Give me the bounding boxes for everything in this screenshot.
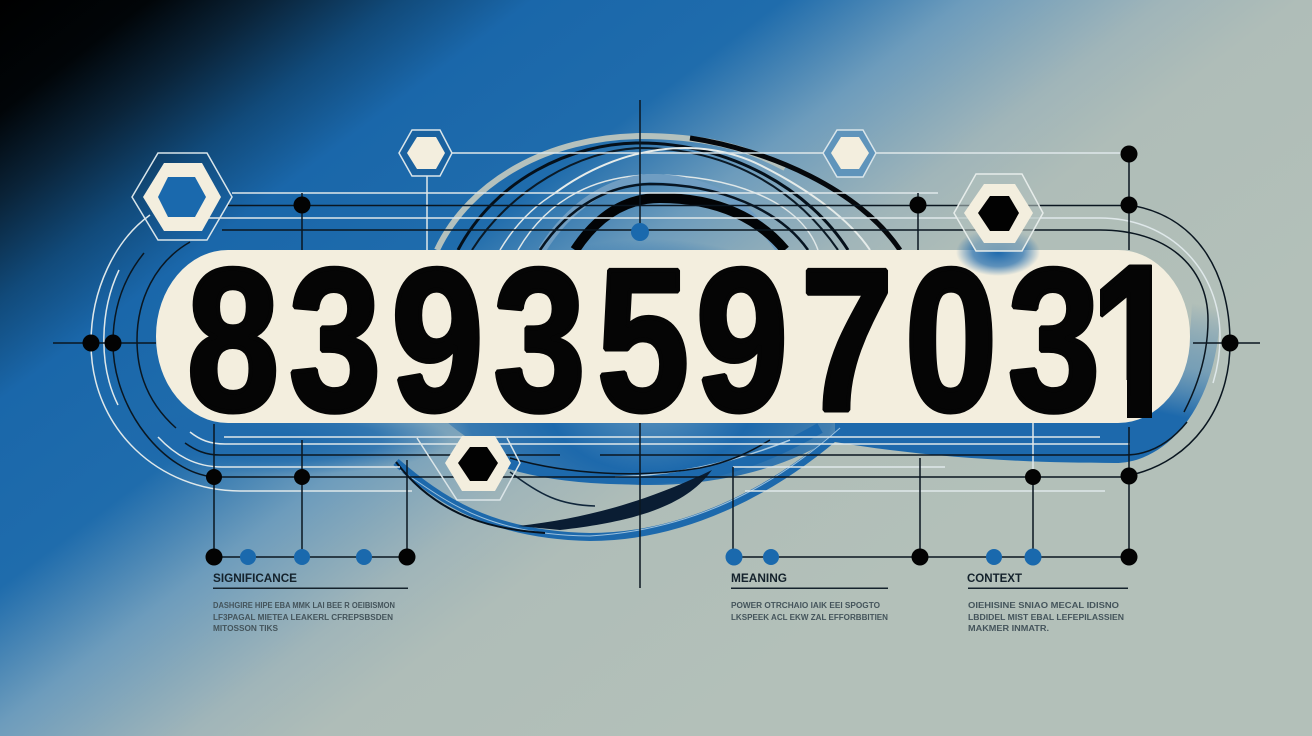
panel: meaning: MEANING bbox=[731, 573, 787, 585]
large number: 8 bbox=[187, 227, 279, 454]
large number: 3 bbox=[289, 227, 381, 454]
panel: significance bbox=[213, 573, 408, 633]
icon: small hexagon top right bbox=[823, 130, 876, 177]
large number: 1 bbox=[1090, 221, 1182, 465]
large number: 9 bbox=[696, 227, 788, 454]
large number: 5 bbox=[597, 227, 689, 454]
blue crescent under the number pill bbox=[835, 300, 1220, 463]
icon: small hexagon top left bbox=[399, 130, 452, 176]
large number bbox=[190, 264, 1152, 418]
panel: context: MAKMER INMATR. bbox=[968, 624, 1049, 633]
connector lines: light bbox=[91, 153, 1220, 491]
swooshes below the pill bbox=[396, 428, 845, 537]
blue halo under right hexagon bbox=[956, 228, 1040, 276]
concentric arcs above the pill bbox=[437, 136, 900, 250]
panel: meaning: LKSPEEK ACL EKW ZAL EFFORBBITIEN bbox=[731, 613, 888, 622]
panel: significance: LF3PAGAL MIETEA LEAKERL CFREPSBSDEN bbox=[213, 613, 393, 622]
panel: significance: SIGNIFICANCE bbox=[213, 573, 297, 585]
large number: 0 bbox=[905, 227, 997, 454]
number pill bbox=[156, 250, 1190, 423]
large number: 7 bbox=[801, 227, 893, 454]
panel: context: CONTEXT bbox=[967, 573, 1022, 585]
left blue wash under the pill bbox=[110, 405, 450, 475]
icon: large blue hexagon left bbox=[132, 153, 232, 240]
large number: 9 bbox=[391, 227, 484, 454]
icon: black hexagon right bbox=[954, 174, 1043, 251]
panel: significance: DASHGIRE HIPE EBA MMK LAI BEE R OEIBISMON bbox=[213, 601, 395, 610]
connector nodes bbox=[82, 146, 1238, 566]
connector lines: dark bbox=[53, 100, 1260, 588]
large number: 3 bbox=[493, 227, 586, 454]
panel: meaning: POWER OTRCHAIO IAIK EEI SPOGTO bbox=[731, 601, 880, 610]
panel: context bbox=[967, 573, 1128, 633]
panel: context: OIEHISINE SNIAO MECAL IDISNO bbox=[968, 601, 1119, 610]
large number: 3 bbox=[1008, 227, 1100, 454]
panel: significance: MITOSSON TIKS bbox=[213, 624, 279, 633]
icon: black hexagon bottom bbox=[417, 436, 520, 500]
central blue glow bbox=[410, 215, 890, 485]
panel: context: LBDIDEL MIST EBAL LEFEPILASSIEN bbox=[968, 613, 1124, 622]
panel: meaning bbox=[731, 573, 888, 622]
